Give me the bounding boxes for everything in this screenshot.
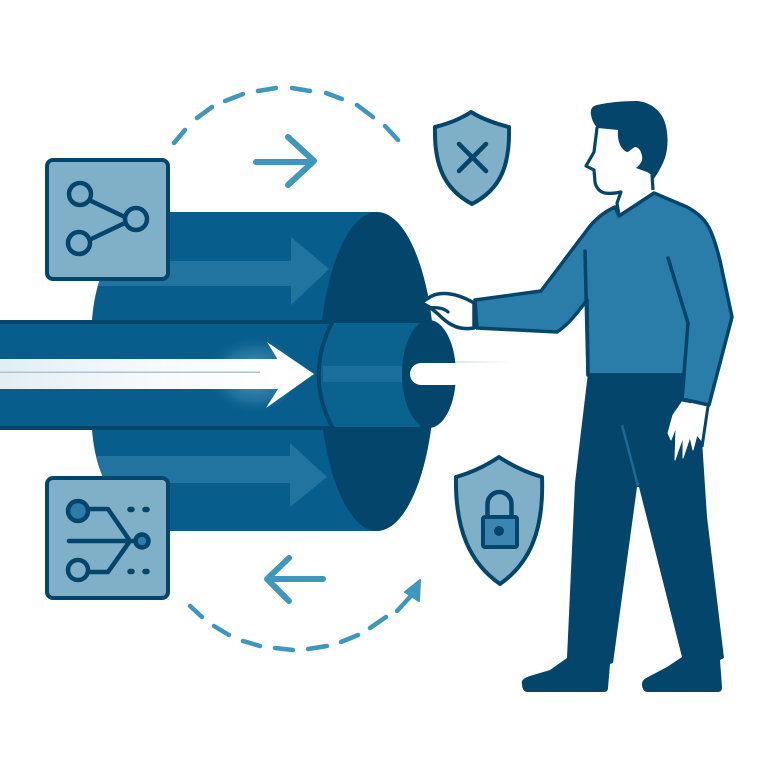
person: neck and face — [586, 120, 654, 216]
cylinder end face — [319, 212, 435, 531]
person: lower hand — [668, 402, 708, 460]
central pipe — [0, 320, 512, 430]
flow arrow: lower — [95, 443, 327, 507]
person — [421, 101, 732, 692]
arrow: pointing right — [256, 137, 314, 185]
shield icon: lock — [456, 457, 542, 584]
icon card: network nodes — [47, 160, 168, 279]
pipe collar — [319, 321, 420, 428]
pipe opening — [402, 320, 456, 428]
flow arrow: upper — [95, 237, 329, 305]
glowing data arrow — [0, 335, 314, 415]
person: trousers and shoes — [522, 373, 724, 692]
icon card: merging routes — [47, 478, 168, 598]
large cylinder — [92, 212, 435, 531]
shield icon: blocked — [435, 112, 509, 204]
dashed cycle arc: top — [174, 88, 398, 143]
person: sweater — [475, 193, 732, 405]
person: hair — [591, 101, 668, 180]
beam in opening — [410, 363, 456, 385]
person: reaching hand — [421, 293, 474, 329]
arrow: pointing left — [267, 558, 323, 601]
illustration: person inspecting secure pipeline — [0, 86, 734, 692]
dashed cycle arc: bottom with arrowhead — [190, 580, 420, 650]
